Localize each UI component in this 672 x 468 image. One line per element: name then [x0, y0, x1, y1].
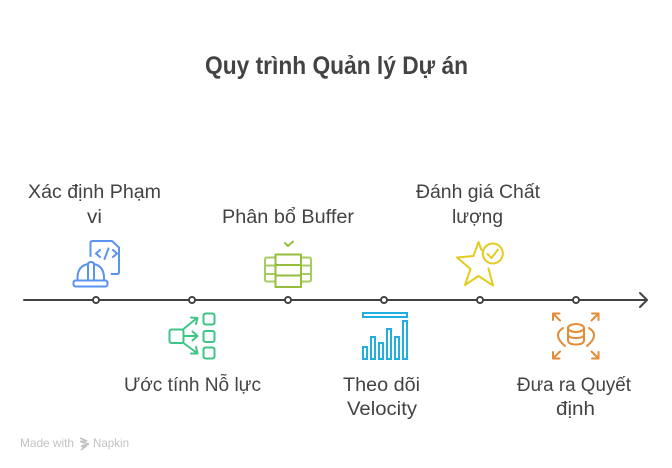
footer: made with napkin: Made with: [20, 436, 74, 450]
timeline arrow: [24, 293, 647, 307]
step 1 label: vi: [87, 207, 102, 228]
step 1 label: Xác định Phạm: [28, 182, 161, 203]
step 5 label: lượng: [452, 207, 503, 228]
title: Quy trình Quản lý Dự án: [205, 52, 468, 80]
timeline nodes: [93, 297, 579, 303]
step 6 label: [517, 375, 632, 420]
step 6 label: Đưa ra Quyết: [517, 375, 632, 396]
icon: helmet and code document: [74, 241, 119, 286]
step 1 label: [28, 182, 161, 228]
step 4 label: Theo dõi: [343, 375, 420, 396]
footer: made with napkin: [20, 436, 129, 450]
icon: star with check badge: [457, 242, 503, 286]
step 3 label: Phân bổ Buffer: [222, 207, 355, 228]
icon: buffer stack with check: [265, 242, 311, 287]
step 2 label: Ước tính Nỗ lực: [124, 374, 261, 396]
footer: made with napkin: Napkin: [93, 436, 129, 450]
step 4 label: Velocity: [347, 399, 418, 420]
icon: branching boxes: [170, 314, 214, 358]
step 5 label: Đánh giá Chất: [416, 182, 541, 203]
step 5 label: [416, 182, 541, 228]
icon: velocity bar chart: [363, 313, 407, 359]
icon: database with expanding arrows: [553, 314, 598, 358]
step 4 label: [343, 375, 420, 420]
step 6 label: định: [556, 399, 595, 420]
